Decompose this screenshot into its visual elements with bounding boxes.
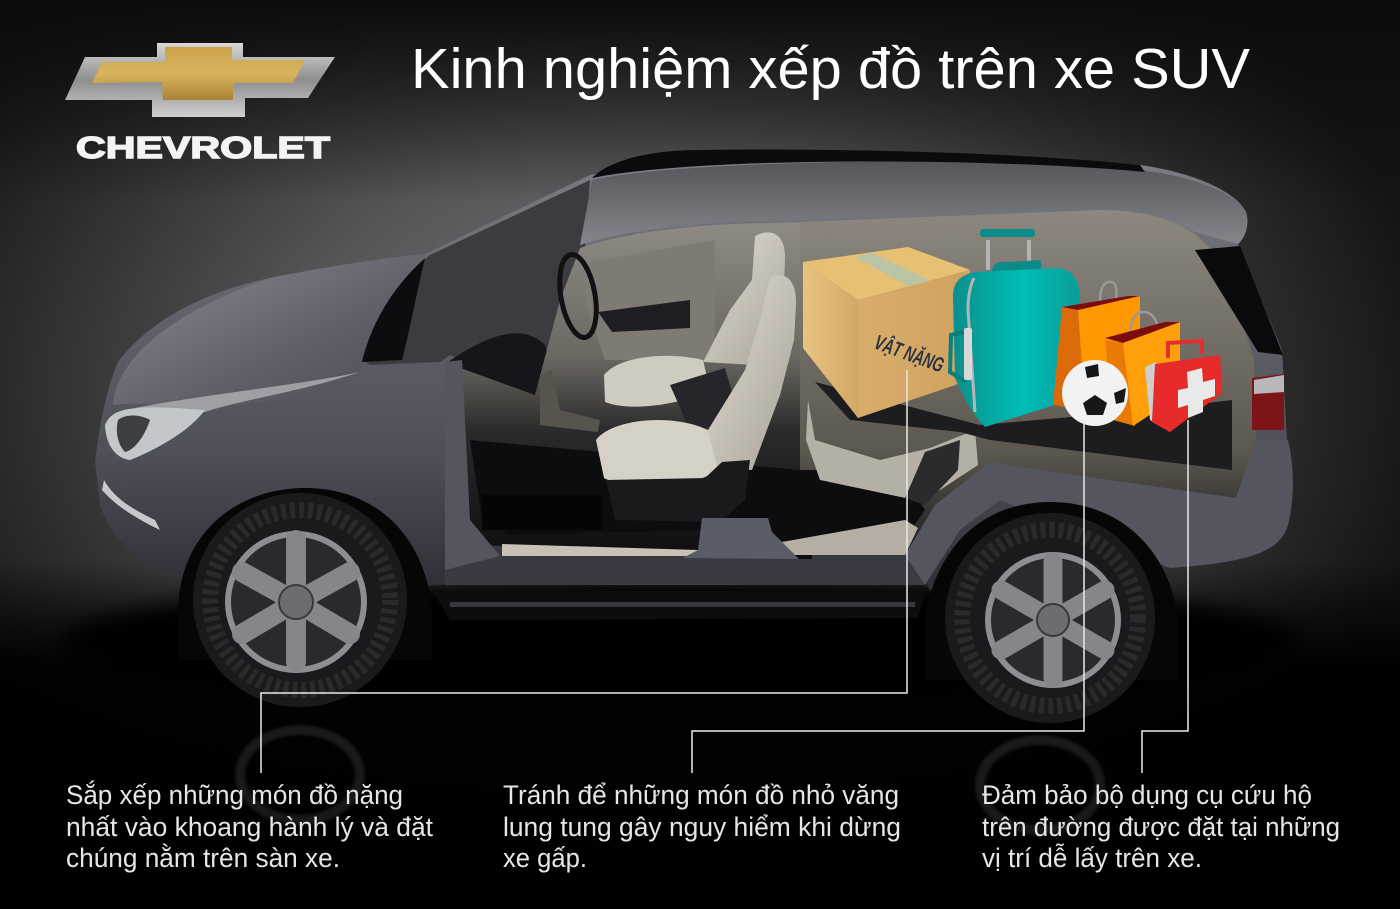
football (1062, 360, 1128, 426)
floor dark area (470, 440, 925, 545)
tail light chrome (1254, 375, 1284, 394)
front wheel (193, 493, 407, 707)
bowtie gold (92, 47, 305, 100)
B pillar base (660, 518, 800, 572)
front wheel arch (178, 488, 432, 660)
text block: first-aid kit: Đảm bảo bộ dụng cụ cứu hộ (982, 780, 1312, 810)
cargo items (803, 229, 1222, 432)
box top (803, 247, 970, 300)
first-aid kit (1145, 341, 1222, 432)
bumper highlight (102, 480, 160, 530)
bag handles (1130, 312, 1158, 340)
bag handles (1100, 282, 1116, 302)
text block: heavy items: chúng nằm trên sàn xe. (66, 842, 340, 873)
running board (432, 590, 925, 620)
seat cushion (596, 420, 718, 487)
rim (228, 534, 364, 670)
tire (193, 493, 407, 707)
center console (670, 368, 740, 430)
kit cross (1178, 368, 1215, 418)
windshield dark edge (362, 258, 425, 362)
suitcase (950, 229, 1080, 427)
A pillar edge (445, 360, 500, 570)
text block: heavy items (66, 779, 433, 873)
cargo interior (800, 210, 1256, 555)
box left side (803, 262, 858, 418)
seat back (708, 275, 796, 470)
suitcase side handle (950, 332, 966, 382)
Chevrolet logo (65, 43, 335, 165)
wheel reflections on floor (240, 730, 1100, 830)
rear glass (1195, 246, 1283, 355)
door sill front (502, 544, 698, 556)
suitcase handle (988, 240, 1029, 270)
folded seat bracket (905, 440, 960, 505)
cardboard box (803, 247, 970, 418)
text block: first-aid kit: vị trí dễ lấy trên xe. (982, 842, 1202, 873)
dashboard (448, 333, 553, 478)
suitcase grip (992, 260, 1041, 272)
hood (113, 254, 425, 410)
hood highlight (135, 372, 360, 412)
rear wheel (945, 513, 1155, 723)
tail light (1252, 374, 1284, 430)
rocker panel (445, 556, 925, 585)
seat base (606, 460, 750, 522)
tire (945, 513, 1155, 723)
text block: loose items: Tránh để những món đồ nhỏ văng (503, 780, 899, 810)
front passenger seat (604, 232, 794, 430)
spokes (1001, 562, 1105, 678)
shopping bag front (1105, 312, 1180, 426)
headlight inner (117, 416, 150, 452)
kit body (1152, 355, 1222, 432)
title: Kinh nghiệm xếp đồ trên xe SUV (411, 37, 1250, 101)
bag side (1053, 307, 1085, 410)
kit handle (1168, 341, 1202, 358)
ball patches (1083, 364, 1126, 415)
text block: loose items: lung tung gây nguy hiểm khi dừng (503, 812, 901, 842)
headlight (105, 407, 205, 460)
wordmark: CHEVROLET (76, 130, 330, 165)
box front side (858, 270, 970, 418)
rear quarter panel (905, 440, 1293, 585)
bag front (1078, 296, 1140, 410)
rear-set seat cushion (604, 356, 710, 407)
door sill rear (782, 520, 918, 555)
gear console (540, 370, 600, 432)
windshield glass (362, 180, 590, 390)
callout line: heavy items (261, 370, 907, 773)
roof rail (592, 150, 1145, 178)
handle bar (980, 229, 1035, 237)
spokes (242, 540, 350, 662)
steering wheel (554, 252, 602, 340)
rear wheel arch (925, 502, 1178, 680)
hub (1037, 604, 1069, 636)
text block: first-aid kit: trên đường được đặt tại những (982, 812, 1340, 842)
SUV cutaway illustration (95, 150, 1293, 723)
cargo floor (815, 382, 1232, 470)
front floor mat (482, 495, 602, 530)
text block: loose items: xe gấp. (503, 843, 587, 873)
running board highlight (450, 602, 915, 607)
car body (95, 156, 1293, 590)
suitcase latch bar (968, 278, 975, 412)
suitcase shell (953, 268, 1080, 427)
text block: first-aid kit (982, 780, 1340, 873)
bag inner (1062, 296, 1140, 310)
hub (279, 585, 313, 619)
box tape (855, 253, 940, 297)
bowtie chrome (65, 43, 335, 117)
kit side (1145, 362, 1170, 432)
text block: loose items (503, 780, 901, 873)
bag side (1105, 340, 1135, 426)
rear-set seat back (703, 232, 794, 365)
car shadow (60, 578, 1300, 702)
rim (988, 555, 1118, 685)
door panel (585, 240, 715, 360)
text block: heavy items: nhất vào khoang hành lý và đặt (66, 812, 433, 842)
roof panel (580, 161, 1247, 245)
driver seat (596, 275, 796, 522)
box label: VẬT NẶNG (871, 330, 947, 377)
bag front (1123, 322, 1180, 426)
shopping bag back (1053, 282, 1140, 410)
folded second row seat (806, 400, 978, 500)
callout line: loose items (692, 420, 1084, 773)
text block: heavy items: Sắp xếp những món đồ nặng (66, 779, 403, 810)
door panel dark pocket (598, 300, 690, 332)
bag inner (1105, 322, 1180, 343)
cabin interior (452, 222, 812, 560)
callout line: first-aid kit (1142, 420, 1188, 773)
